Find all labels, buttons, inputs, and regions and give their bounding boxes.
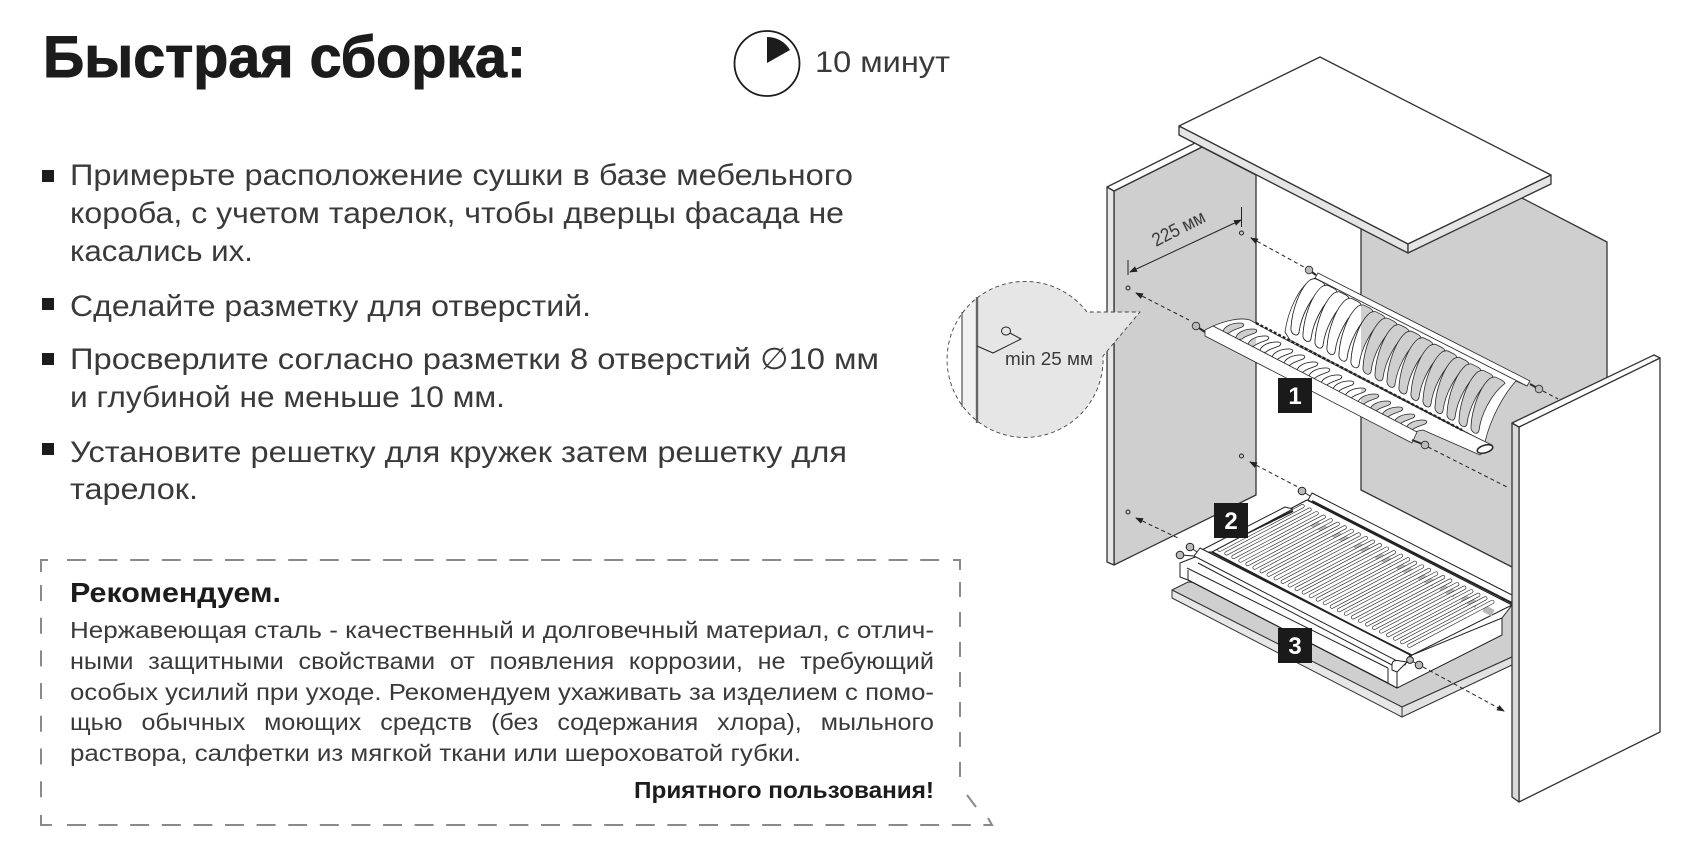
- recommendation body: раствора, салфетки из мягкой ткани или шероховатой губки.: [70, 740, 801, 766]
- recommendation body: [70, 617, 934, 766]
- time label: 10 минут: [815, 46, 950, 79]
- grid slots: [1220, 506, 1492, 646]
- illustration: cabinet with dish rack: [947, 57, 1660, 802]
- drill holes: [1126, 231, 1244, 514]
- badge 3: [1278, 628, 1312, 663]
- bullet 4: тарелок.: [70, 473, 198, 506]
- icon: clock: [734, 31, 800, 96]
- recommendation heading: Рекомендуем.: [70, 577, 281, 608]
- title: Быстрая сборка:: [43, 25, 526, 90]
- back panel: [1361, 197, 1607, 567]
- bullet 1: касались их.: [70, 235, 253, 268]
- tray corner caps: [1392, 660, 1407, 672]
- panel edge lines: [961, 312, 963, 407]
- short side tube: [1198, 507, 1293, 552]
- slatted grid: [1208, 500, 1512, 655]
- recommendation body: ными защитными свойствами от появления коррозии, не требующий: [70, 648, 934, 674]
- rack bolts: [1192, 266, 1543, 449]
- arrows to holes: [1136, 238, 1558, 711]
- badge 1: [1278, 378, 1312, 413]
- recommendation body: особых усилий при уходе. Рекомендуем ухаживать за изделием с помо-: [70, 679, 934, 705]
- back tube: [1308, 493, 1512, 603]
- hinge line: [1256, 323, 1462, 430]
- callout bubble: [947, 281, 1140, 437]
- dimension: 225 mm: [1128, 207, 1242, 275]
- recommendation body: Нержавеющая сталь - качественный и долговечный материал, с отлич-: [70, 617, 934, 643]
- callout: minimum edge distance: [947, 281, 1140, 437]
- dashed frame: [41, 560, 992, 825]
- hole and dimension: [977, 327, 1021, 353]
- bullet 1: [42, 159, 853, 268]
- badge 3: 3: [1288, 633, 1302, 660]
- bullet 3: [42, 343, 879, 414]
- lower loops: [1223, 323, 1427, 430]
- drip tray: [1176, 487, 1512, 688]
- tray body: [1180, 500, 1512, 688]
- badge 1: 1: [1288, 383, 1302, 410]
- bullet 4: [42, 436, 847, 506]
- badge 2: [1214, 503, 1248, 538]
- callout label: min 25 мм: [1005, 349, 1093, 369]
- grid edges: [1210, 501, 1512, 656]
- recommendation body: щью обычных моющих средств (без содержания хлора), мыльного: [70, 709, 934, 735]
- lower tray band: [1213, 319, 1492, 455]
- shelf: [1172, 582, 1512, 717]
- bullet 1: Примерьте расположение сушки в базе мебельного: [70, 159, 853, 192]
- tray bolts: [1176, 487, 1423, 669]
- bullet 3: и глубиной не меньше 10 мм.: [70, 381, 505, 414]
- back rail: [1315, 273, 1530, 386]
- badge 2: 2: [1224, 508, 1238, 535]
- top panel: [1179, 57, 1551, 253]
- bullet list: [42, 159, 879, 506]
- left panel: [1107, 143, 1256, 565]
- front panel: [1512, 355, 1660, 802]
- dimension: 225 mm: 225 мм: [1149, 207, 1209, 251]
- closing line: Приятного пользования!: [634, 777, 934, 803]
- bullet 4: Установите решетку для кружек затем решетку для: [70, 436, 847, 469]
- panel: recommendation: [41, 560, 992, 825]
- bullet 3: Просверлите согласно разметки 8 отверстий ∅10 мм: [70, 343, 879, 376]
- bullet 1: короба, с учетом тарелок, чтобы дверцы фасада не: [70, 197, 844, 230]
- dish rack: [1192, 266, 1543, 455]
- front rail: [1205, 326, 1417, 443]
- upright plate band: [1285, 278, 1527, 442]
- bullet 2: Сделайте разметку для отверстий.: [70, 290, 591, 323]
- rail end oval: [1476, 443, 1494, 455]
- upright slots: [1291, 279, 1505, 433]
- front tube: [1194, 548, 1410, 665]
